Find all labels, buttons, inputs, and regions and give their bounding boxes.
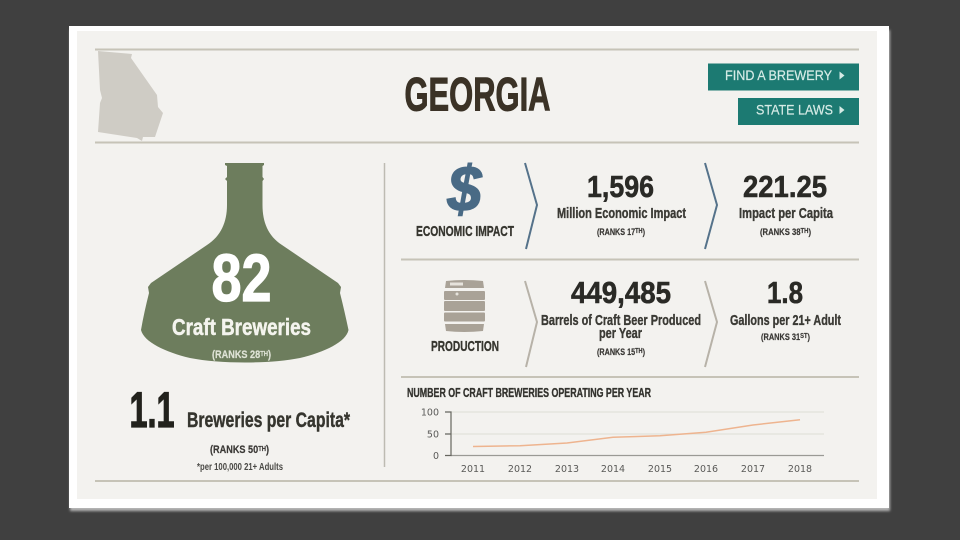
button: state laws: STATE LAWS: [756, 102, 833, 118]
label: production: PRODUCTION: [431, 338, 499, 355]
stat: 82: 82: [212, 241, 272, 316]
button: find a brewery: [708, 64, 859, 90]
stat: breweries per capita: TH: [258, 446, 266, 453]
stat: gallons per adult: 1.8: [767, 275, 803, 310]
panel: craft breweries bottle: [141, 163, 348, 362]
panel: state profile card: [77, 31, 877, 499]
stat: impact per capita: 221.25: [743, 169, 827, 204]
stat: million economic impact: TH: [635, 228, 643, 235]
panel: production: [431, 275, 841, 367]
arrow: chevron: [525, 163, 537, 249]
stat: barrels produced: (RANKS 15: [597, 347, 645, 357]
x-axis labels: 2013: [555, 464, 579, 475]
rank: 28th: ): [268, 349, 271, 361]
stat: barrels produced: [541, 275, 701, 357]
stat: breweries per capita: ): [266, 444, 269, 456]
arrow: chevron: [525, 281, 537, 367]
rank: 28th: (RANKS 28: [212, 349, 270, 361]
stat: barrels produced: 449,485: [571, 275, 671, 310]
button: find a brewery: FIND A BREWERY: [725, 68, 832, 83]
x-axis labels: [461, 464, 812, 475]
button: state laws: [738, 98, 859, 125]
stat: barrels produced: ): [643, 347, 645, 357]
stat: impact per capita: [739, 169, 834, 237]
x-axis labels: 2018: [788, 464, 812, 475]
label: economic impact: ECONOMIC IMPACT: [416, 223, 514, 240]
stat: barrels produced: Barrels of Craft Beer Produced: [541, 313, 701, 329]
x-axis labels: 2014: [601, 464, 625, 475]
title: GEORGIA: [404, 68, 550, 120]
stat: gallons per adult: (RANKS 31: [761, 332, 809, 342]
chart title: NUMBER OF CRAFT BREWERIES OPERATING PER YEAR: [407, 385, 651, 400]
stat: million economic impact: [557, 169, 686, 237]
rank: 28th: TH: [260, 351, 268, 358]
stat: breweries per capita: 1.1: [130, 382, 174, 438]
stat: breweries per capita: Breweries per Capita*: [187, 409, 351, 432]
x-axis labels: 2011: [461, 464, 485, 475]
data line: [473, 420, 800, 446]
icon: dollar sign: $: [447, 153, 483, 225]
y-axis labels: 50: [427, 430, 439, 440]
stat: million economic impact: (RANKS 17: [597, 227, 645, 237]
y-axis labels: 0: [433, 451, 439, 462]
chart: breweries per year: [407, 385, 824, 475]
stat: breweries per capita: [130, 382, 351, 473]
x-axis labels: 2015: [648, 464, 672, 475]
y-axis labels: 100: [421, 408, 439, 418]
stat: million economic impact: ): [643, 227, 645, 237]
stat: million economic impact: Million Economic Impact: [557, 206, 686, 222]
icon: Georgia state map: [98, 51, 163, 141]
stat: gallons per adult: Gallons per 21+ Adult: [730, 313, 841, 329]
stat: impact per capita: (RANKS 38: [760, 227, 808, 237]
stat: million economic impact: 1,596: [587, 169, 654, 204]
x-axis labels: 2017: [741, 464, 765, 475]
stat: gallons per adult: [730, 275, 841, 342]
stat: barrels produced: per Year: [599, 326, 642, 342]
icon: keg: [444, 280, 485, 332]
stat: breweries per capita: (RANKS 50: [210, 444, 268, 456]
x-axis labels: 2016: [694, 464, 718, 475]
arrow: chevron: [705, 163, 717, 249]
stat: breweries per capita: *per 100,000 21+ Adults: [197, 462, 283, 473]
stat: barrels produced: TH: [635, 348, 643, 355]
stat: gallons per adult: ST: [800, 333, 808, 340]
stat: impact per capita: Impact per Capita: [739, 206, 834, 222]
stat: impact per capita: TH: [800, 228, 808, 235]
label: craft breweries: Craft Breweries: [172, 314, 311, 340]
stat: impact per capita: ): [808, 227, 811, 237]
y-axis labels: [421, 408, 439, 462]
icon: bottle shape: [141, 163, 348, 362]
stat: gallons per adult: ): [808, 332, 810, 342]
x-axis labels: 2012: [508, 464, 532, 475]
arrow: chevron: [705, 281, 717, 367]
panel: economic impact: [416, 153, 834, 249]
